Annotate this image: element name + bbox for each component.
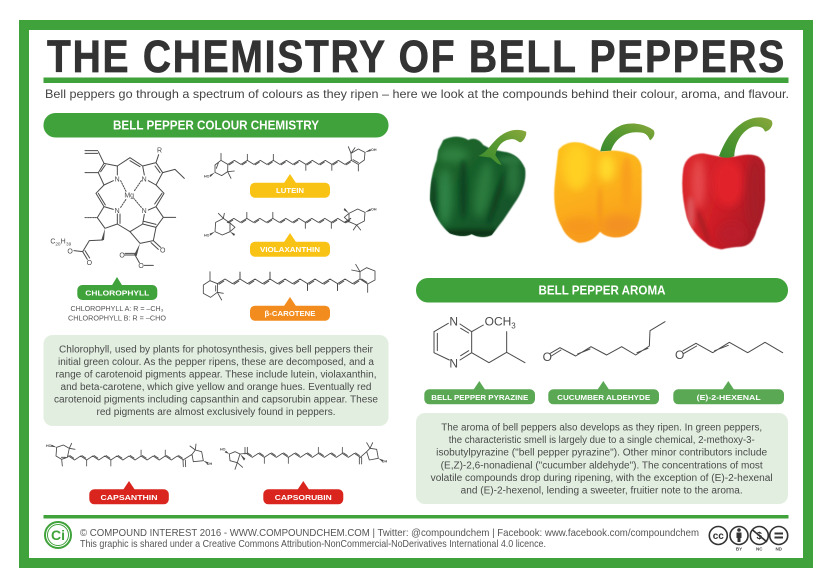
chlorophyll structure — [50, 148, 184, 270]
footer credits: © COMPOUND INTEREST 2016 - WWW.COMPOUNDCHEM.COM | Twitter: @compoundchem | Facebook: www.facebook.com/compoundchem — [80, 527, 699, 539]
label: violaxanthin: VIOLAXANTHIN — [260, 245, 320, 254]
chlorophyll structure: N — [115, 177, 120, 184]
capsorubin structure: HO — [220, 448, 226, 452]
text box: aroma: (E,Z)-2,6-nonadienal ("cucumber aldehyde"). The concentrations of most — [441, 460, 763, 471]
text box: colour chemistry: red pigments are almost exclusively found in peppers. — [96, 407, 336, 418]
label: cucumber aldehyde — [548, 381, 659, 404]
(E)-2-hexenal structure: O — [675, 348, 684, 362]
beta-carotene structure — [203, 264, 375, 300]
violaxanthin structure — [204, 207, 377, 237]
capsanthin structure — [46, 443, 213, 467]
text box: aroma: the characteristic smell is largely due to a single chemical, 2-methoxy-3- — [449, 435, 755, 446]
capsorubin structure: OH — [382, 460, 388, 464]
label: bell pepper pyrazine — [424, 381, 535, 404]
title rule — [44, 78, 788, 83]
label: lutein: LUTEIN — [276, 186, 304, 195]
text box: colour chemistry: and beta-carotene, which give yellow and orange hues. Eventually red — [60, 382, 372, 393]
chlorophyll structure: O — [87, 260, 93, 267]
text box: colour chemistry: range of carotenoid pigments appear. These include lutein, violaxanthin, — [56, 370, 376, 380]
heading: bell pepper colour chemistry — [44, 113, 388, 138]
chlorophyll structure: O — [160, 247, 166, 254]
text box: colour chemistry: carotenoid pigments including capsanthin and capsorubin appear. These — [54, 394, 378, 406]
lutein structure: OH — [371, 148, 377, 152]
text box: colour chemistry: Chlorophyll, used by plants for photosynthesis, gives bell peppers their — [59, 344, 374, 356]
bell pepper pyrazine structure: OCH — [485, 315, 511, 329]
text box: colour chemistry — [44, 335, 388, 426]
label: capsorubin — [263, 481, 343, 504]
icon: compound interest logo — [45, 522, 71, 548]
(E)-2-hexenal structure — [675, 342, 783, 362]
chlorophyll structure: H — [61, 239, 66, 246]
chlorophyll structure: 20 — [55, 241, 61, 246]
red pepper illustration — [682, 117, 772, 249]
chlorophyll structure: O — [67, 249, 73, 256]
capsanthin structure: OH — [207, 462, 213, 466]
label: capsanthin — [89, 481, 169, 504]
heading: bell pepper colour chemistry: BELL PEPPER COLOUR CHEMISTRY — [113, 118, 320, 132]
label: beta-carotene — [250, 297, 330, 321]
heading: bell pepper aroma — [416, 278, 788, 302]
chlorophyll structure: 39 — [66, 241, 72, 246]
lutein structure — [204, 147, 377, 178]
icons: creative commons licence: $ — [757, 531, 763, 542]
icons: creative commons licence: BY — [736, 546, 742, 552]
yellow pepper illustration — [554, 124, 654, 243]
icon: compound interest logo: Ci — [51, 527, 65, 543]
text box: aroma: and (E)-2-hexenol, lending a sweeter, fruitier note to the aroma. — [461, 486, 743, 496]
bell pepper pyrazine structure: N — [449, 315, 458, 329]
icons: creative commons licence: cc — [713, 531, 724, 542]
text box: aroma — [416, 413, 788, 504]
label: capsorubin: CAPSORUBIN — [275, 493, 332, 502]
violaxanthin structure: HO — [204, 233, 210, 237]
chlorophyll structure: N — [115, 208, 120, 215]
capsorubin structure — [220, 443, 388, 469]
chlorophyll structure: N — [142, 177, 147, 184]
cucumber aldehyde structure — [543, 322, 665, 364]
chlorophyll variants text — [68, 306, 167, 322]
chlorophyll variants text: CHLOROPHYLL B: R = –CHO — [68, 316, 167, 322]
chlorophyll structure: O — [119, 253, 125, 260]
label: chlorophyll — [77, 277, 157, 300]
bell pepper pyrazine structure: 3 — [511, 321, 516, 330]
footer credits — [80, 527, 699, 550]
chlorophyll structure: N — [142, 208, 147, 215]
label: beta-carotene: β-CAROTENE — [264, 309, 316, 318]
label: lutein — [250, 174, 330, 198]
chlorophyll variants text: CHLOROPHYLL A: R = –CH₃ — [70, 306, 164, 313]
label: (E)-2-hexenal: (E)-2-HEXENAL — [697, 393, 761, 402]
icons: creative commons licence: ND — [775, 546, 783, 552]
chlorophyll structure: O — [138, 263, 144, 270]
violaxanthin structure: OH — [371, 207, 377, 211]
footer rule — [44, 515, 788, 518]
text box: colour chemistry: initial green colour. As the pepper ripens, these are decomposed, and a — [58, 357, 374, 368]
text box: aroma: isobutylpyrazine ("bell pepper pyrazine"). Other minor contributors include — [436, 448, 768, 458]
text box: aroma: volatile compounds drop during ripening, with the exception of (E)-2-hexenal — [431, 473, 773, 484]
subtitle: Bell peppers go through a spectrum of colours as they ripen – here we look at the compounds behind their colour, aroma, and flavour. — [45, 87, 789, 101]
chlorophyll structure: C — [50, 239, 55, 246]
footer credits: This graphic is shared under a Creative Commons Attribution-NonCommercial-NoDerivatives International 4.0 licence. — [80, 538, 546, 550]
cucumber aldehyde structure: O — [543, 350, 552, 364]
heading: bell pepper aroma: BELL PEPPER AROMA — [538, 284, 666, 298]
label: cucumber aldehyde: CUCUMBER ALDEHYDE — [557, 393, 650, 402]
chlorophyll structure: R — [157, 148, 162, 155]
bell pepper pyrazine structure: N — [449, 356, 458, 370]
label: chlorophyll: CHLOROPHYLL — [85, 288, 150, 298]
capsanthin structure: HO — [46, 444, 52, 448]
chlorophyll structure: Mg — [124, 193, 134, 200]
label: (E)-2-hexenal — [673, 381, 784, 404]
icons: creative commons licence: NC — [756, 546, 763, 552]
label: capsanthin: CAPSANTHIN — [100, 493, 158, 502]
green pepper illustration — [423, 130, 526, 237]
text box: aroma: The aroma of bell peppers also develops as they ripen. In green peppers, — [441, 422, 762, 433]
bell pepper pyrazine structure — [434, 315, 525, 370]
label: violaxanthin — [250, 233, 330, 257]
icons: creative commons licence — [709, 526, 788, 552]
label: bell pepper pyrazine: BELL PEPPER PYRAZINE — [431, 393, 528, 402]
lutein structure: HO — [204, 174, 210, 178]
